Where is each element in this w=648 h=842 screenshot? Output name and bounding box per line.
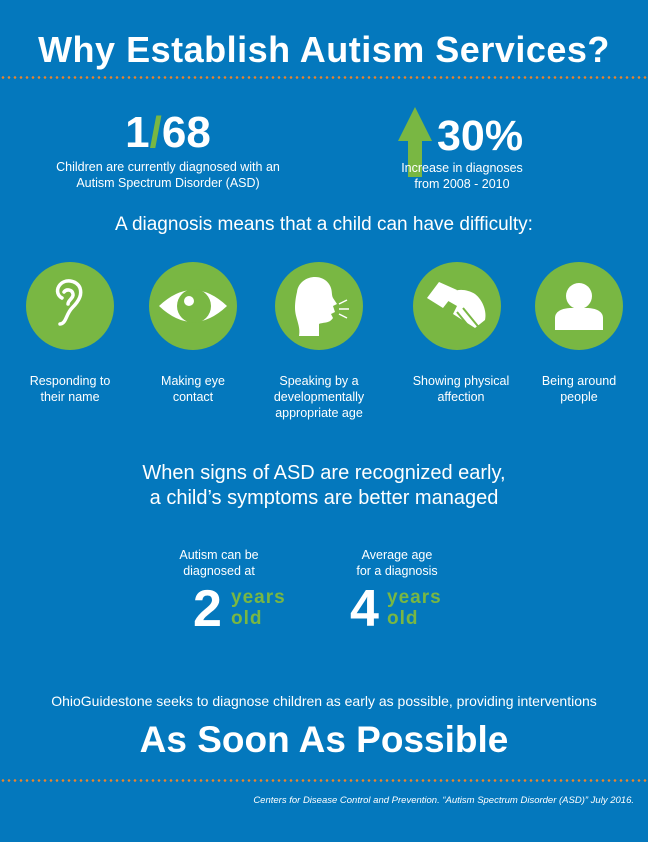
- stat: 4 years: old: [387, 608, 418, 629]
- label: people: Being around: [542, 374, 616, 388]
- stat: 2 years: diagnosed at: [183, 564, 255, 578]
- stat: 2 years: [179, 548, 286, 638]
- text: early signs: When signs of ASD are recognized early,: [142, 462, 506, 484]
- stat: 4 years: for a diagnosis: [356, 564, 438, 578]
- label: eye contact: [161, 374, 225, 404]
- label: responding: Responding to: [30, 374, 110, 388]
- stat: 2 years: years: [231, 587, 286, 608]
- stat: 1/68: Children are currently diagnosed with an: [56, 160, 280, 174]
- stat: 2 years: old: [231, 608, 262, 629]
- label: eye contact: Making eye: [161, 374, 225, 388]
- label: responding: [30, 374, 110, 404]
- text: early signs: [142, 462, 506, 509]
- label: people: people: [560, 390, 598, 404]
- title: Why Establish Autism Services?: [38, 29, 610, 70]
- label: speaking: Speaking by a: [279, 374, 359, 388]
- label: speaking: appropriate age: [275, 406, 363, 420]
- text: OhioGuidestone: OhioGuidestone seeks to diagnose children as early as possible, providing interventions: [51, 693, 597, 709]
- heading: as soon as possible: As Soon As Possible: [140, 719, 508, 760]
- heading: diagnosis: A diagnosis means that a child can have difficulty:: [115, 214, 533, 235]
- label: responding: their name: [40, 390, 100, 404]
- icon: hands: [413, 262, 501, 350]
- caption: increase: from 2008 - 2010: [414, 177, 510, 191]
- text: early signs: a child’s symptoms are better managed: [150, 487, 498, 509]
- icon: person: [535, 262, 623, 350]
- label: speaking: [274, 374, 364, 420]
- stat: 4 years: years: [387, 587, 442, 608]
- label: eye contact: contact: [173, 390, 213, 404]
- stat: 2 years: 2: [193, 580, 222, 638]
- label: people: [542, 374, 616, 404]
- caption: increase: Increase in diagnoses: [401, 161, 523, 175]
- icon: up arrow: [398, 107, 432, 177]
- icon: speaking head: [275, 262, 363, 350]
- label: affection: Showing physical: [413, 374, 509, 388]
- caption: increase: [401, 161, 523, 191]
- stat: 1/68: Autism Spectrum Disorder (ASD): [76, 176, 260, 190]
- stat: 30%: 30%: [437, 112, 523, 160]
- label: affection: affection: [437, 390, 485, 404]
- stat: 4 years: 4: [350, 580, 379, 638]
- stat: 4 years: [350, 548, 442, 638]
- stat: 4 years: Average age: [362, 548, 432, 562]
- label: speaking: developmentally: [274, 390, 364, 404]
- stat: 2 years: Autism can be: [179, 548, 259, 562]
- icon: ear: [26, 262, 114, 350]
- citation: Centers for Disease Control and Prevention. “Autism Spectrum Disorder (ASD)” July 2016.: [253, 795, 634, 806]
- stat: 1/68: [56, 108, 280, 190]
- label: affection: [413, 374, 509, 404]
- icon: eye: [149, 262, 237, 350]
- stat: 1/68: 1/68: [125, 108, 211, 157]
